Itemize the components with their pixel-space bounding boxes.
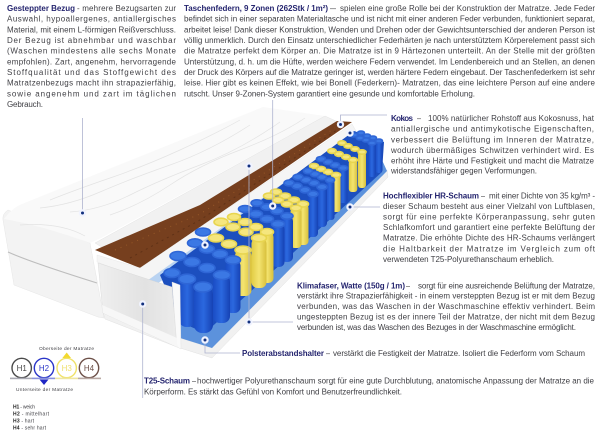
text block: Hochflexibler HR-Schaum: Hochflexibler HR-Schaum <box>383 191 479 200</box>
text block: Klimafaser, Watte: verstärkt ihre Strapazierfähigkeit - in einem versteppten Bezug ist er mit dem Bezug <box>297 292 595 301</box>
illustration: mattress cross-section <box>3 107 388 358</box>
text block: Kokos: erhöht ihre Härte und Festigkeit und macht die Matratze <box>391 156 595 165</box>
text block: Taschenfedern: arbeitet leise! Dank dieser Konstruktion, Wenden und Drehen oder der Gewichtsunterschied der anderen Person ist <box>184 25 596 34</box>
text block: Gesteppter Bezug: Material, mit einem L-förmigen Reißverschluss. <box>7 25 176 34</box>
text block: Polsterabstandshalter: verstärkt die Festigkeit der Matratze. Isoliert die Federform vom Schaum <box>333 349 585 358</box>
text block: Polsterabstandshalter: – <box>326 349 330 358</box>
text block: Kokos: Kokos <box>391 114 414 123</box>
cover foam strip <box>95 116 350 252</box>
text block: Gesteppter Bezug <box>7 4 177 109</box>
text block: Taschenfedern <box>184 4 596 98</box>
text block: Hochflexibler HR-Schaum: Schlafkomfort und garantiert eine perfekte Belüftung der <box>383 223 595 232</box>
text block: Kokos: antiallergische und antimykotische Eigenschaften, <box>391 125 594 134</box>
text block: Gesteppter Bezug: - mehrere Bezugsarten zur <box>77 4 176 13</box>
text block: Taschenfedern: der Druck des Körpers auf die Matratze geringer ist, werden härtere Federn eingebaut. Der Taschenfederkern ist sehr <box>184 68 595 77</box>
legend: firmness diagram: Oberseite der Matratze <box>39 346 94 352</box>
text block: Hochflexibler HR-Schaum: die Haltbarkeit der Matratze im Vergleich zum oft <box>383 244 596 253</box>
light blue layer <box>147 131 358 284</box>
legend: firmness key: H3 - hart <box>13 418 35 424</box>
white base slab <box>103 170 388 358</box>
icon: H3 circle: H3 <box>62 364 72 373</box>
text block: Klimafaser, Watte: – <box>406 281 410 290</box>
white foam layer <box>97 124 356 281</box>
legend: firmness diagram <box>10 346 101 393</box>
text block: Taschenfedern: rutscht. Unser 9-Zonen-System garantiert eine gesunde und komfortable Erholung. <box>184 89 475 98</box>
text block: Klimafaser, Watte: Klimafaser, Watte (150g / 1m) <box>297 281 405 290</box>
blue base layer <box>175 160 387 348</box>
text block: Polsterabstandshalter: Polsterabstandshalter <box>242 349 324 358</box>
legend: firmness diagram: Unterseite der Matratze <box>16 387 73 393</box>
icon: yellow top marker <box>62 352 71 358</box>
text block: Kokos <box>390 114 595 176</box>
mattress cover top surface <box>4 107 325 243</box>
text block: Kokos: – <box>417 114 421 123</box>
text block: Taschenfedern: – <box>330 4 337 13</box>
text block: Kokos: wodurch übermäßiges Schwitzen verhindert wird. Es <box>390 146 594 155</box>
text block: Hochflexibler HR-Schaum: sorgt für eine perfekte Körperanpassung, sehr guten <box>383 213 595 222</box>
legend: firmness key: H2 - mittelhart <box>13 411 50 417</box>
text block: Gesteppter Bezug: Stoffqualität und das Stoffgewicht des <box>7 68 176 77</box>
text block: Klimafaser, Watte: sorgt für eine ausreichende Belüftung der Matratze, <box>418 281 595 290</box>
text block: T25-Schaum <box>144 377 595 396</box>
legend: firmness key <box>13 404 50 432</box>
text block: Hochflexibler HR-Schaum <box>383 191 596 264</box>
pocket spring tops, back rows <box>164 131 376 278</box>
text block: Klimafaser, Watte: verbunden ist, was das Waschen des Bezuges in der Waschmaschine ermöglicht. <box>297 323 576 332</box>
legend: firmness key: H4 - sehr hart <box>13 426 47 432</box>
text block: T25-Schaum: – <box>192 377 196 386</box>
text block: Taschenfedern: die Matratze perfekt dem Körper an. Die Matratze ist in 9 Härtezonen unterteilt. An der Stelle mit der größten <box>184 47 595 56</box>
text block: Kokos: widerstandsfähiger gegen Verformungen. <box>390 167 537 176</box>
text block: Taschenfedern: spielen eine große Rolle bei der Konstruktion der Matratze. Jede Feder <box>340 4 595 13</box>
text block: Taschenfedern: leise. Hier gibt es keinen Effekt, wie bei Bonell (Federkern)- Matratzen, das eine leichtere Person auf eine andere <box>184 79 596 88</box>
text block: Hochflexibler HR-Schaum: mit einer Dichte von 35 kg/m³ - <box>489 191 595 200</box>
leader lines and markers <box>80 100 387 398</box>
text block: T25-Schaum: T25-Schaum <box>144 377 190 386</box>
text block: Taschenfedern: völlig unmerklich. Durch den Einsatz unterschiedlicher Federhärten je nach unterstütztem Körperelement passt sich <box>184 36 595 45</box>
text block: Gesteppter Bezug: sowie angenehm und zart im täglichen <box>7 89 176 98</box>
legend base bars <box>10 378 101 379</box>
icon: H2 circle: H2 <box>39 364 50 373</box>
icon: H4 circle: H4 <box>84 364 95 373</box>
text block: Hochflexibler HR-Schaum: – <box>481 191 485 200</box>
coconut layer <box>95 121 352 268</box>
text block: Gesteppter Bezug: Auswahl, hypoallergenes, antiallergisches <box>7 15 176 24</box>
text block: Klimafaser, Watte <box>297 281 595 332</box>
text block: Klimafaser, Watte: ungesteppten Bezug ist es der innere Teil der Matratze, der nicht mit dem Bezug <box>297 313 595 322</box>
text block: Hochflexibler HR-Schaum: verwendeten T25-Polyurethanschaum erheblich. <box>383 255 554 264</box>
text block: Taschenfedern: befindet sich in einer separaten Materialtasche und ist nicht mit einer anderen Feder verbunden, funktioniert separat, <box>184 15 595 24</box>
text block: Klimafaser, Watte: verbunden, was das Waschen in der Waschmaschine effektiv verhindert. Beim <box>297 302 595 311</box>
text block: Kokos: 100% natürlicher Rohstoff aus Kokosnuss, hat <box>428 114 595 123</box>
pocket springs, front row <box>178 139 382 333</box>
icon: H1 circle: H1 <box>17 364 27 373</box>
text block: Gesteppter Bezug: Gesteppter Bezug <box>7 4 75 13</box>
text block: Hochflexibler HR-Schaum: Matratze. Die erhöhte Dichte des HR-Schaums verlängert <box>383 234 596 243</box>
text block: Gesteppter Bezug: Gebrauch. <box>7 100 43 109</box>
text block: T25-Schaum: hochwertiger Polyurethanschaum sorgt für eine gute Durchblutung, anatomische Anpassung der Matratze an die <box>197 377 595 386</box>
legend: firmness key: H1 - weich <box>13 404 35 410</box>
text block: Hochflexibler HR-Schaum: dieser Schaum besteht aus einer Vielzahl von Luftblasen, <box>383 202 595 211</box>
text block: Taschenfedern: Unterstützung, d. h. um die Hüfte, werden weichere Federn verwendet. Im Lendenbereich und an Stellen, an denen <box>184 57 595 66</box>
text block: Gesteppter Bezug: Matratzenbezugs macht ihn strapazierfähig, <box>7 79 176 88</box>
icon: blue bottom marker <box>40 380 48 385</box>
text block: Kokos: verbessert die Belüftung im Inneren der Matratze, <box>391 135 594 144</box>
HR foam front block <box>98 263 181 349</box>
dark blue spring bed <box>160 131 384 333</box>
text block: T25-Schaum: Körperform. Es stärkt das Gefühl von Komfort und Benutzerfreundlichkeit. <box>144 387 402 396</box>
text block: Gesteppter Bezug: empfohlen). Zart, angenehm, hervorragende <box>7 57 177 66</box>
text block: Gesteppter Bezug: (Waschen mindestens alle sechs Monate <box>7 47 177 56</box>
text block: Taschenfedern: Taschenfedern, 9 Zonen (262Stk / 1m²) <box>184 4 328 13</box>
text block: Gesteppter Bezug: Der Bezug ist abnehmbar und waschbar <box>7 36 176 45</box>
mattress cover front face <box>3 210 104 318</box>
